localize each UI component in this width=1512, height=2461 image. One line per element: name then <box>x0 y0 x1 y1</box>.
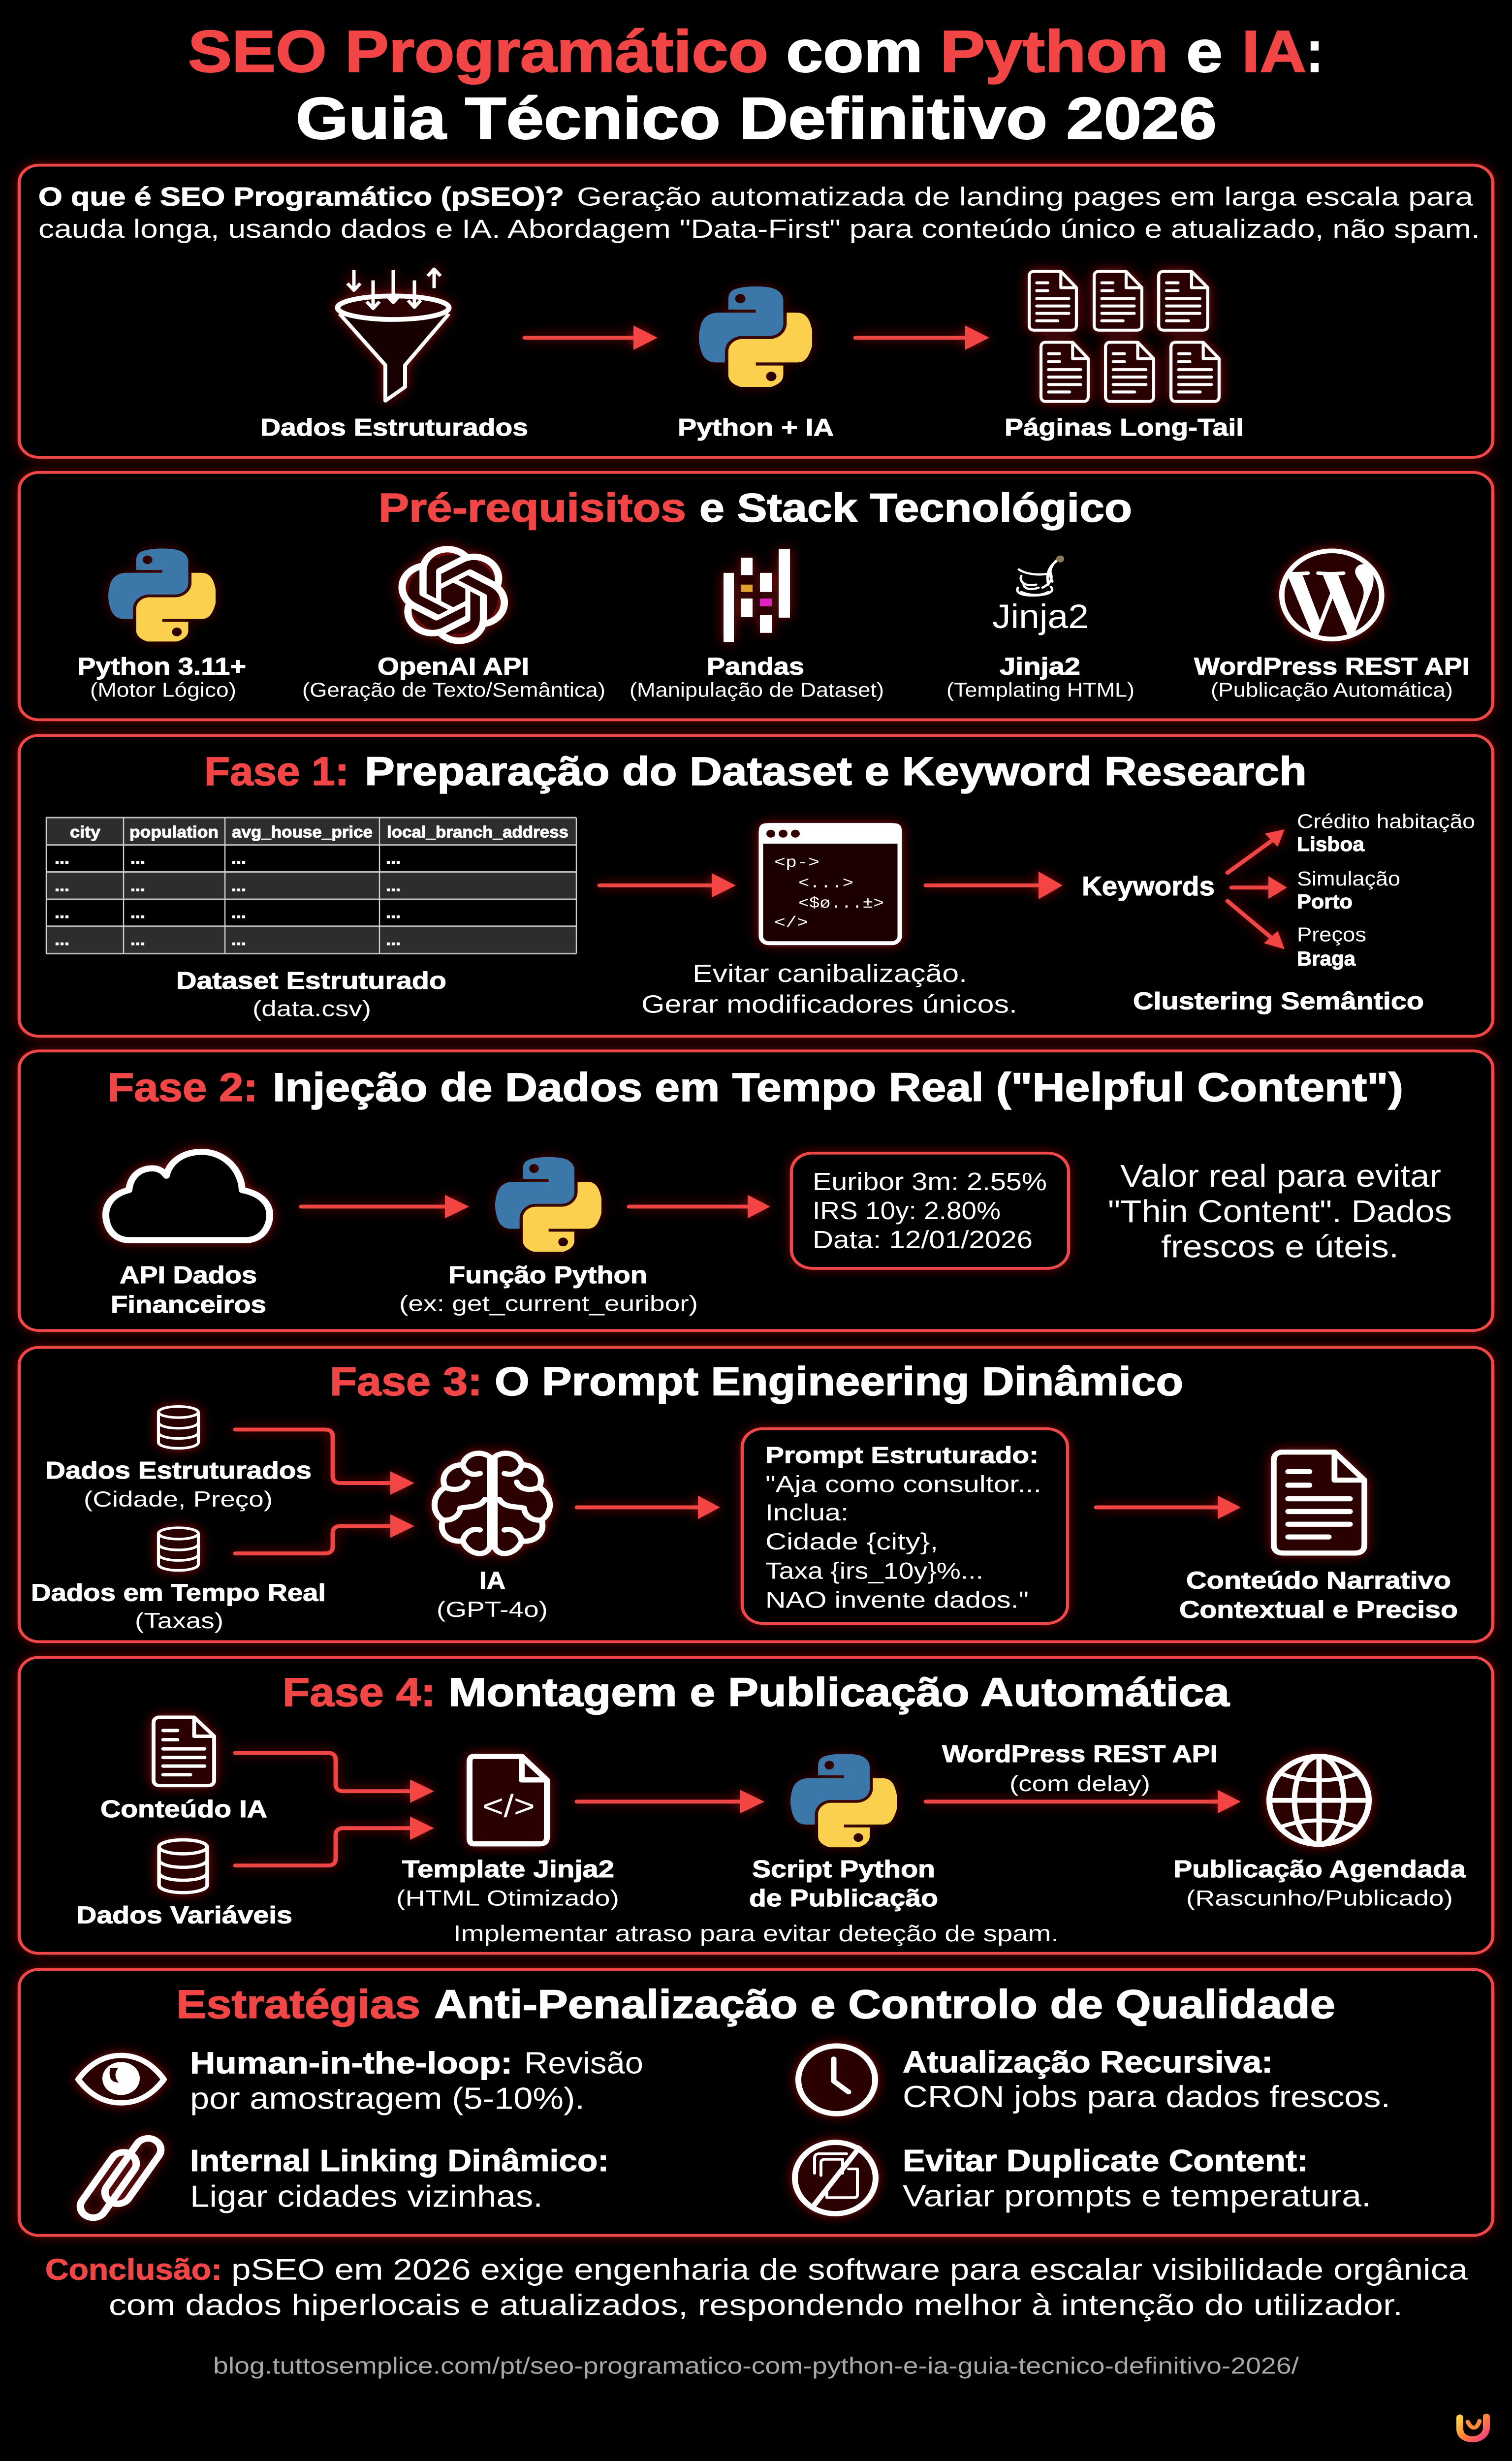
prompt box: Prompt Estruturado: <box>765 1442 1039 1468</box>
arrow <box>599 873 736 898</box>
heading: O Prompt Engineering Dinâmico <box>495 1359 1183 1404</box>
title: Python <box>940 19 1168 85</box>
heading: Fase 4: <box>283 1670 436 1715</box>
text: human-in-the-loop <box>190 2046 643 2115</box>
arrow <box>1096 1496 1241 1519</box>
icon: cloud <box>106 1152 270 1240</box>
icon: jinja2 <box>992 556 1089 635</box>
captions <box>176 959 1424 1021</box>
label: (GPT-4o) <box>437 1597 548 1621</box>
panel: what is pSEO <box>19 165 1493 457</box>
icon: python <box>108 548 217 644</box>
label: (Rascunho/Publicado) <box>1186 1886 1453 1910</box>
label <box>437 1567 548 1621</box>
stack labels: (Motor Lógico) <box>90 679 236 701</box>
heading: Pré-requisitos <box>378 486 686 530</box>
data table: local_branch_address <box>387 823 568 841</box>
labels: Financeiros <box>111 1291 266 1318</box>
intro text: cauda longa, usando dados e IA. Abordagem "Data-First" para conteúdo único e atualizado, não spam. <box>38 214 1480 243</box>
icon: database <box>158 1528 198 1571</box>
stack labels: Jinja2 <box>1000 653 1080 680</box>
arrow <box>926 872 1063 899</box>
icon: clock <box>798 2046 875 2114</box>
text: human-in-the-loop: Human-in-the-loop: <box>190 2046 512 2080</box>
stack labels: (Templating HTML) <box>946 679 1134 701</box>
labels: (ex: get_current_euribor) <box>399 1291 698 1316</box>
connector arrows <box>235 1753 434 1865</box>
stack labels: OpenAI API <box>378 653 529 680</box>
conclusion: Conclusão: <box>45 2253 222 2286</box>
data box: Data: 12/01/2026 <box>813 1225 1033 1254</box>
arrow <box>301 1195 469 1218</box>
panel: fase 2 <box>19 1051 1493 1330</box>
heading: e Stack Tecnológico <box>699 486 1132 530</box>
text: recursive update: CRON jobs para dados frescos. <box>903 2080 1390 2114</box>
data table: ... <box>386 850 401 867</box>
text: recursive update <box>903 2045 1390 2114</box>
data table: ... <box>130 877 145 895</box>
label: Dados Variáveis <box>76 1902 292 1929</box>
keyword clusters: Preços <box>1297 924 1366 946</box>
keyword clusters: Porto <box>1297 891 1353 913</box>
arrow <box>577 1790 764 1813</box>
value text: frescos e úteis. <box>1161 1230 1399 1264</box>
icon: jinja2: Jinja2 <box>992 597 1089 635</box>
icon: document <box>1274 1452 1364 1553</box>
captions: Clustering Semântico <box>1133 988 1424 1015</box>
panel: strategies <box>19 1969 1493 2236</box>
data table: ... <box>130 931 145 948</box>
conclusion: pSEO em 2026 exige engenharia de software para escalar visibilidade orgânica <box>231 2253 1468 2286</box>
title: com <box>786 19 923 85</box>
icon: brain <box>435 1453 550 1553</box>
icon: six documents <box>1029 271 1219 402</box>
keywords label: Keywords <box>1082 871 1215 901</box>
icon: globe <box>1269 1757 1369 1844</box>
icon: code file <box>470 1757 547 1844</box>
label <box>45 1457 312 1511</box>
labels: Python + IA <box>678 414 834 441</box>
title: SEO Programático <box>188 19 768 85</box>
heading: Fase 1: <box>204 749 349 794</box>
captions: Dataset Estruturado <box>176 967 446 994</box>
text: recursive update: Atualização Recursiva: <box>903 2045 1273 2079</box>
panel: fase 4 <box>19 1657 1493 1954</box>
icon: database <box>158 1407 198 1448</box>
arrow with label: WordPress REST API <box>942 1740 1218 1767</box>
data box: IRS 10y: 2.80% <box>813 1196 1001 1225</box>
data table: population <box>129 823 219 841</box>
branching arrows <box>1228 829 1287 949</box>
label <box>749 1856 938 1912</box>
keyword clusters: Crédito habitação <box>1297 811 1475 833</box>
icon: python <box>790 1754 898 1850</box>
brand logo <box>1460 2417 1486 2439</box>
prompt box: Cidade {city}, <box>765 1528 938 1554</box>
label: Template Jinja2 <box>402 1856 614 1883</box>
icon: wordpress <box>1279 548 1385 641</box>
arrow <box>577 1496 720 1519</box>
title <box>188 19 1323 152</box>
icon: no duplicate <box>795 2143 876 2214</box>
captions: (data.csv) <box>252 996 371 1021</box>
icon: eye <box>78 2055 164 2103</box>
icon: code window: <p-> <box>774 854 819 872</box>
arrow <box>525 325 658 350</box>
text: human-in-the-loop: por amostragem (5-10%). <box>190 2082 585 2115</box>
label <box>1173 1856 1466 1910</box>
icon: code window: <$ø...±> <box>798 895 884 913</box>
label: Script Python <box>752 1856 935 1883</box>
labels: API Dados <box>120 1262 257 1289</box>
text: internal linking <box>190 2144 609 2213</box>
data table: ... <box>231 931 246 948</box>
text: duplicate content: Variar prompts e temperatura. <box>903 2178 1371 2213</box>
data table: ... <box>55 850 69 867</box>
data table: ... <box>55 931 69 948</box>
text: internal linking: Internal Linking Dinâmico: <box>190 2144 609 2177</box>
labels <box>111 1262 698 1318</box>
icon: code window: <...> <box>798 875 853 893</box>
icon: pandas <box>724 549 790 642</box>
text: duplicate content <box>903 2144 1371 2213</box>
prompt box: "Aja como consultor... <box>765 1471 1041 1497</box>
title: : <box>1306 19 1323 85</box>
value text: Valor real para evitar <box>1120 1159 1441 1194</box>
panel: fase 3 <box>19 1348 1493 1641</box>
connector arrows <box>235 1429 414 1553</box>
intro text: Geração automatizada de landing pages em larga escala para <box>577 182 1474 211</box>
data table: ... <box>231 877 246 895</box>
value text <box>1108 1159 1452 1264</box>
heading: Anti-Penalização e Controlo de Qualidade <box>434 1982 1335 2027</box>
label: Dados em Tempo Real <box>31 1579 326 1607</box>
note: Implementar atraso para evitar deteção de spam. <box>453 1922 1059 1946</box>
labels: Função Python <box>448 1262 647 1289</box>
arrow <box>629 1195 770 1218</box>
heading: Injeção de Dados em Tempo Real ("Helpful Content") <box>273 1065 1403 1110</box>
icon: openai <box>399 546 508 644</box>
title: e <box>1186 19 1223 85</box>
label: Publicação Agendada <box>1173 1856 1466 1883</box>
label: Conteúdo IA <box>100 1796 267 1823</box>
conclusion <box>45 2253 1468 2321</box>
heading: Estratégias <box>176 1982 420 2027</box>
data table: ... <box>386 904 401 922</box>
arrow with label: (com delay) <box>1009 1771 1150 1796</box>
label: (HTML Otimizado) <box>396 1886 619 1910</box>
icon: funnel <box>338 269 449 401</box>
icon: code window: </> <box>774 915 808 932</box>
data table: ... <box>231 850 246 867</box>
stack labels: (Publicação Automática) <box>1211 679 1453 701</box>
icon: python <box>699 286 813 389</box>
captions: Gerar modificadores únicos. <box>641 990 1017 1018</box>
data table: city <box>70 823 100 841</box>
icon: code window <box>759 823 902 943</box>
prompt box: Inclua: <box>765 1499 849 1525</box>
labels: Dados Estruturados <box>260 414 528 441</box>
source url: blog.tuttosemplice.com/pt/seo-programatico-com-python-e-ia-guia-tecnico-definitivo-2026/ <box>213 2352 1299 2379</box>
label: Conteúdo Narrativo <box>1186 1567 1451 1594</box>
data table: ... <box>130 850 145 867</box>
data table: ... <box>386 877 401 895</box>
prompt box: NAO invente dados." <box>765 1586 1029 1613</box>
label: (Cidade, Preço) <box>84 1487 273 1511</box>
arrow <box>855 325 989 350</box>
label: IA <box>479 1567 505 1594</box>
stack labels: WordPress REST API <box>1194 653 1470 680</box>
heading: Fase 3: <box>330 1359 482 1404</box>
data table <box>46 818 576 953</box>
arrow with label <box>926 1740 1241 1813</box>
data box <box>791 1153 1069 1268</box>
icon: python <box>495 1157 602 1254</box>
icon: code file: </> <box>482 1788 535 1824</box>
text: internal linking: Ligar cidades vizinhas. <box>190 2179 543 2213</box>
label: de Publicação <box>749 1885 938 1912</box>
heading <box>378 486 1132 530</box>
data table: ... <box>130 904 145 922</box>
title: Guia Técnico Definitivo 2026 <box>296 86 1217 152</box>
heading: Preparação do Dataset e Keyword Research <box>365 749 1307 794</box>
data table: avg_house_price <box>232 823 373 841</box>
text: duplicate content: Evitar Duplicate Content: <box>903 2144 1308 2177</box>
labels <box>260 414 1244 441</box>
captions: Evitar canibalização. <box>693 959 967 987</box>
data box: Euribor 3m: 2.55% <box>813 1167 1047 1196</box>
intro text: O que é SEO Programático (pSEO)? <box>38 182 564 211</box>
stack labels: Python 3.11+ <box>77 653 246 680</box>
value text: "Thin Content". Dados <box>1108 1195 1452 1229</box>
prompt box <box>742 1429 1068 1623</box>
stack labels: (Manipulação de Dataset) <box>630 679 884 701</box>
data table: ... <box>386 931 401 948</box>
title: IA <box>1242 19 1306 85</box>
panel: fase 1 <box>19 735 1493 1036</box>
label: (Taxas) <box>135 1609 223 1633</box>
stack labels: (Geração de Texto/Semântica) <box>302 679 605 701</box>
prompt box: Taxa {irs_10y}%... <box>765 1557 983 1584</box>
heading: Fase 2: <box>107 1065 258 1110</box>
keyword clusters: Braga <box>1297 948 1356 970</box>
intro text <box>38 182 1480 243</box>
label <box>1179 1567 1458 1623</box>
icon: document <box>154 1717 214 1786</box>
keyword clusters: Simulação <box>1297 868 1400 890</box>
icon: link <box>75 2134 166 2222</box>
conclusion: com dados hiperlocais e atualizados, respondendo melhor à intenção do utilizador. <box>109 2288 1403 2321</box>
label <box>31 1579 326 1633</box>
stack labels <box>77 653 1470 701</box>
stack labels: Pandas <box>707 653 804 680</box>
icon: database <box>159 1840 207 1893</box>
heading: Montagem e Publicação Automática <box>448 1670 1230 1715</box>
labels: Páginas Long-Tail <box>1005 414 1244 441</box>
data table: ... <box>231 904 246 922</box>
label: Contextual e Preciso <box>1179 1596 1458 1623</box>
panel: prerequisites <box>19 473 1493 720</box>
keyword clusters <box>1297 811 1475 970</box>
text: human-in-the-loop: Revisão <box>524 2046 643 2080</box>
label: Dados Estruturados <box>45 1457 312 1484</box>
keyword clusters: Lisboa <box>1297 833 1365 855</box>
data table: ... <box>55 877 69 895</box>
data table: ... <box>55 904 69 922</box>
label <box>396 1856 619 1910</box>
